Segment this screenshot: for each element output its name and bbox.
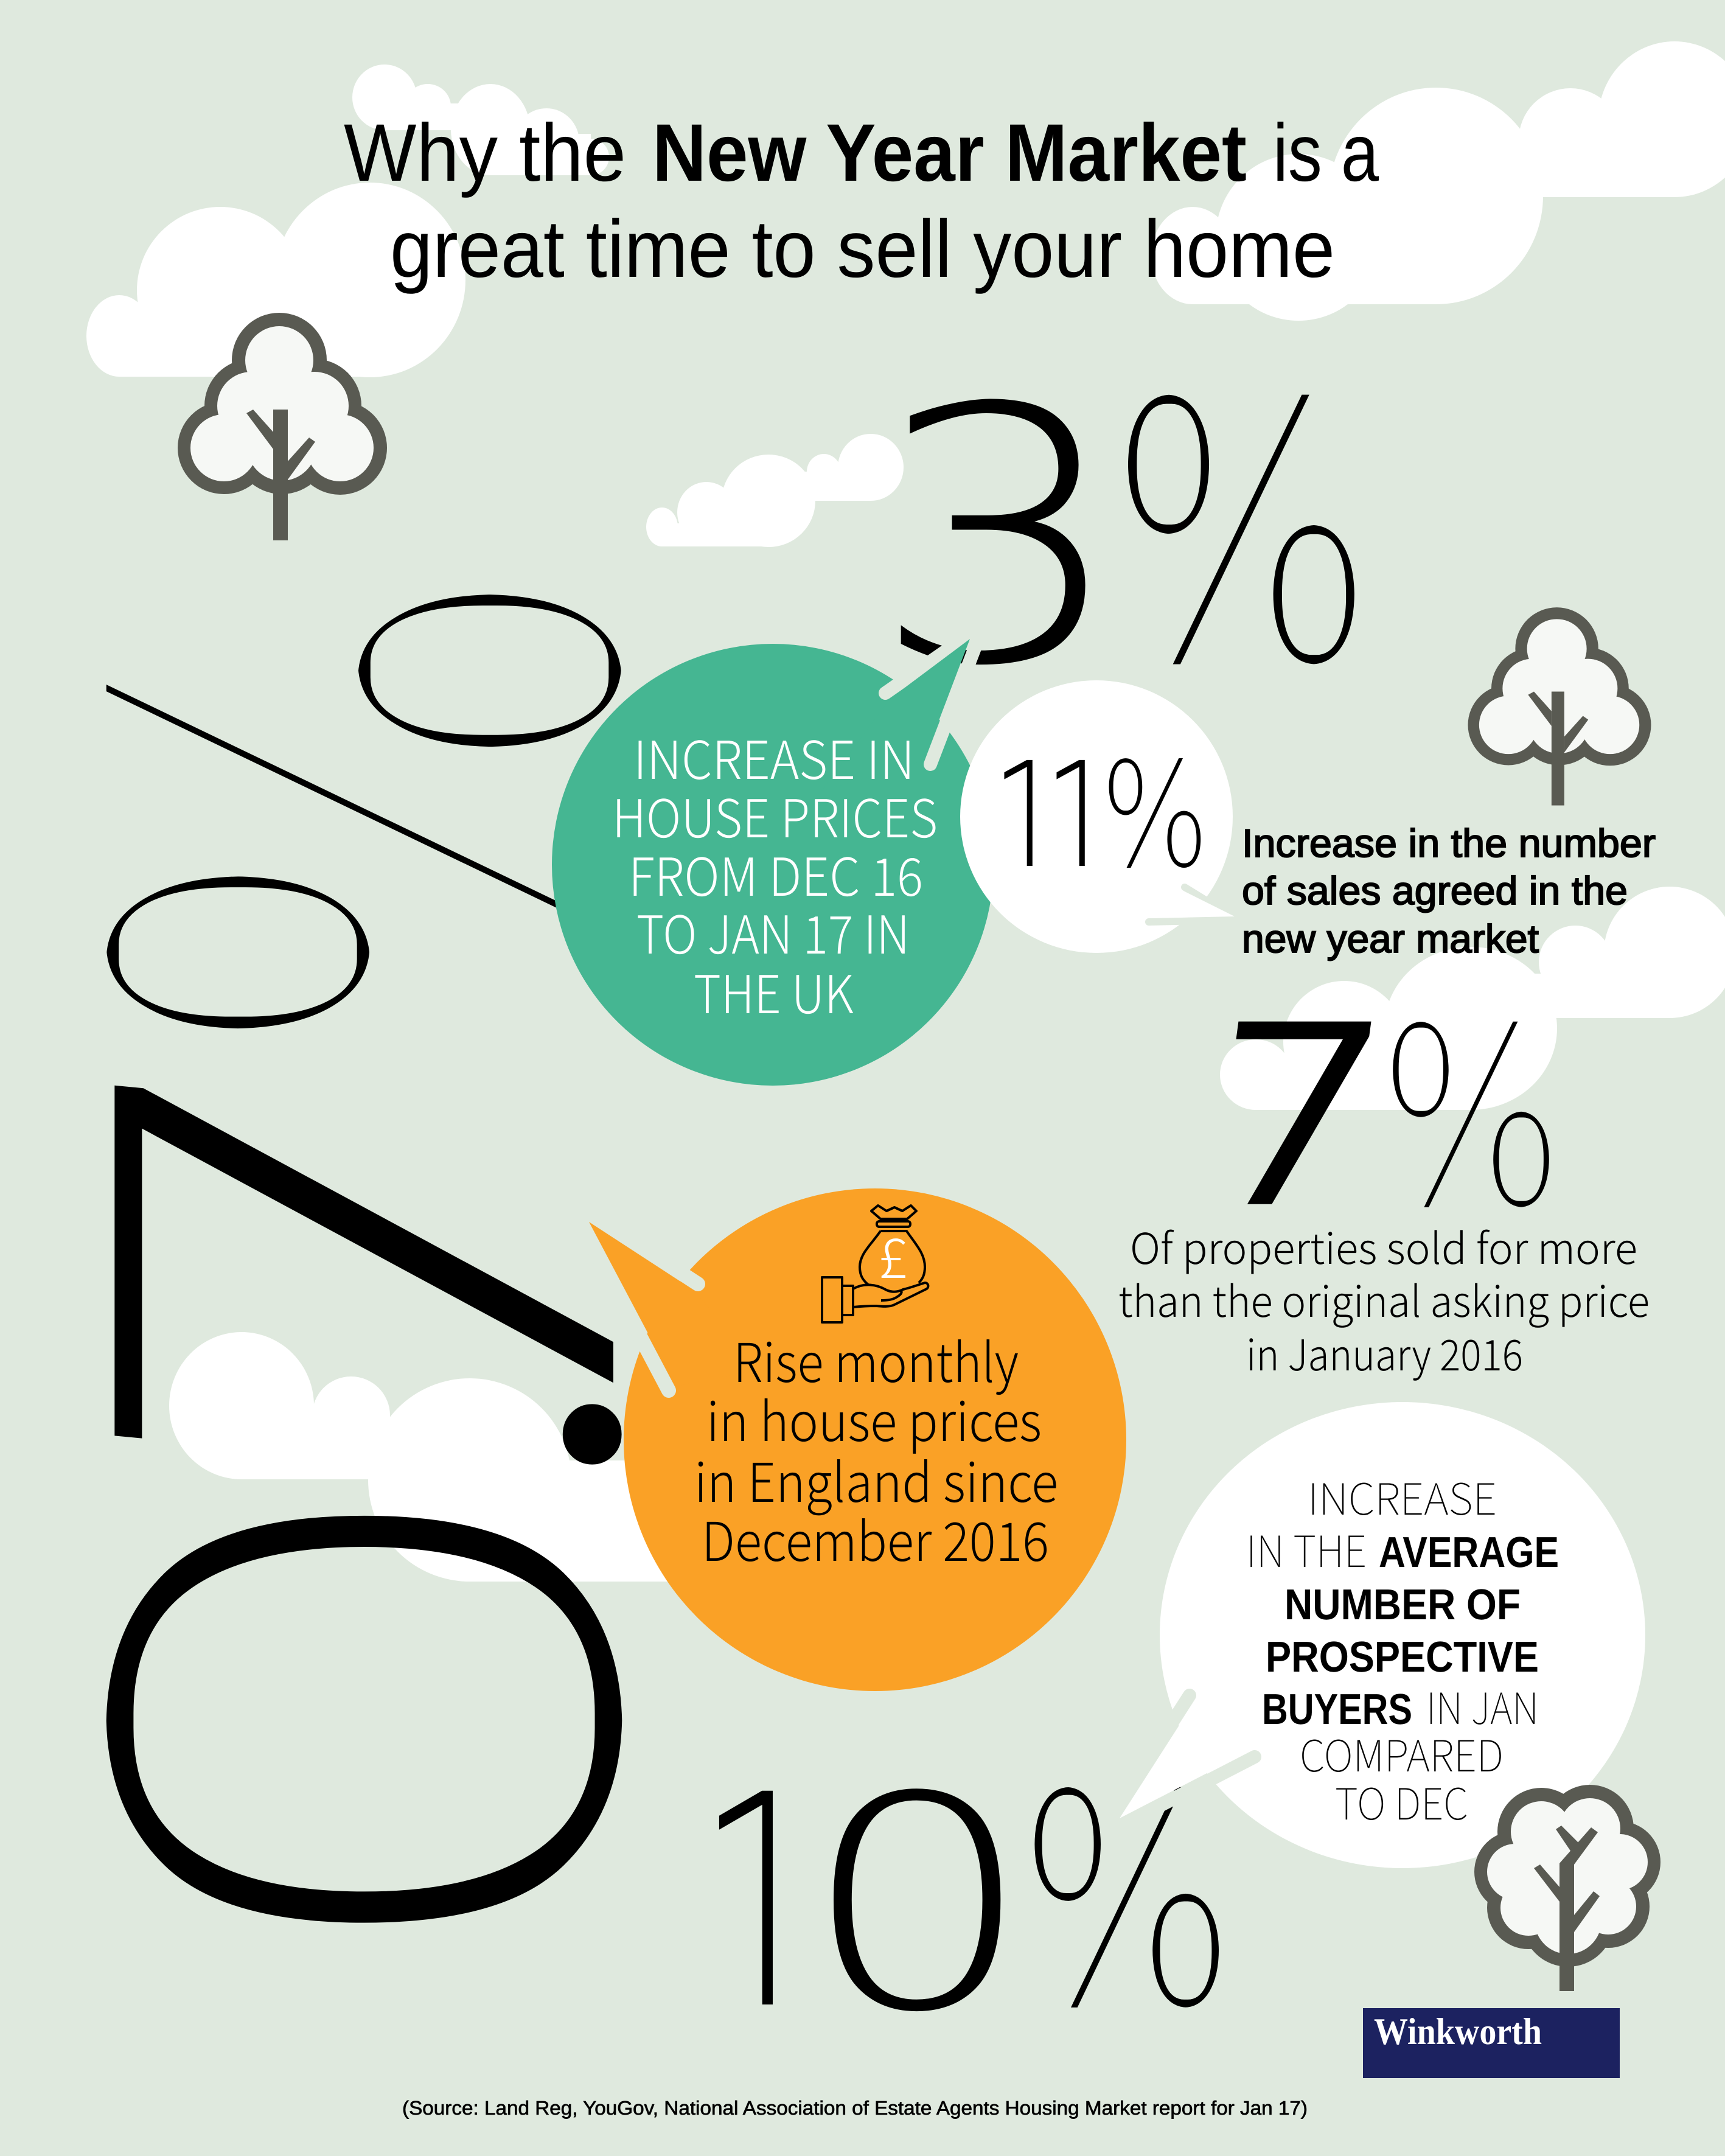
cloud: right behind 7% bbox=[1220, 887, 1725, 1110]
logo: Winkworth bbox=[1363, 2008, 1620, 2078]
speech bubble: white, prospective buyers bbox=[1113, 1402, 1645, 1868]
figure: 10%: 1 bbox=[695, 1729, 832, 2091]
title: Why the bbox=[344, 108, 626, 198]
text: prospective buyers caption: AVERAGE bbox=[1379, 1529, 1559, 1577]
logo: Winkworth: Winkworth bbox=[1374, 2011, 1542, 2053]
text: prospective buyers caption bbox=[1246, 1465, 1559, 1832]
cloud: large top right bbox=[1151, 41, 1725, 321]
text: orange bubble caption: December 2016 bbox=[702, 1499, 1049, 1577]
text: 7% caption: than the original asking price bbox=[1118, 1268, 1650, 1330]
cloud: small top left behind title bbox=[352, 65, 609, 175]
text: green bubble caption: THE UK bbox=[694, 952, 854, 1028]
icon: tree upper left bbox=[178, 313, 387, 540]
big rotated figure: 0.7% bbox=[0, 545, 784, 2013]
figure: 10%: % bbox=[1016, 1730, 1238, 2075]
big rotated figure: 0.7%: 7 bbox=[0, 985, 775, 1563]
title: New Year Market bbox=[652, 108, 1247, 198]
text: green bubble caption: FROM DEC 16 bbox=[629, 835, 923, 911]
text: orange bubble caption: in house prices bbox=[706, 1380, 1042, 1457]
text: 11% caption: of sales agreed in the bbox=[1242, 868, 1628, 913]
text: 11% caption: Increase in the number bbox=[1242, 821, 1656, 865]
figure: 3% bbox=[870, 325, 1378, 747]
text: 11% caption: new year market bbox=[1242, 916, 1539, 961]
icon: tree right bbox=[1468, 607, 1651, 806]
text: green bubble caption: HOUSE PRICES bbox=[612, 776, 938, 853]
figure: 11%: 1 bbox=[992, 729, 1064, 909]
text: prospective buyers caption: TO DEC bbox=[1335, 1770, 1468, 1832]
text: 11% caption bbox=[1242, 821, 1656, 961]
text: green bubble caption: TO JAN 17 IN bbox=[636, 893, 910, 969]
figure: 3%: % bbox=[1104, 325, 1378, 747]
figure: 11%: 1 bbox=[1044, 729, 1117, 909]
text: prospective buyers caption: IN JAN bbox=[1426, 1675, 1539, 1737]
text: prospective buyers caption: IN THE bbox=[1246, 1518, 1367, 1580]
figure: 7%: % bbox=[1376, 973, 1566, 1265]
text: 7% caption bbox=[1118, 1215, 1650, 1383]
text: prospective buyers caption: INCREASE bbox=[1308, 1465, 1497, 1527]
text: orange bubble caption: in England since bbox=[694, 1440, 1058, 1518]
text: prospective buyers caption: BUYERS bbox=[1262, 1686, 1412, 1734]
text: orange bubble caption: Rise monthly bbox=[733, 1320, 1019, 1398]
icon: pound sign: £ bbox=[878, 1215, 908, 1294]
big rotated figure: 0.7%: 0 bbox=[0, 1422, 773, 2013]
big rotated figure: 0.7%: . bbox=[170, 1370, 722, 1498]
text: green bubble caption: INCREASE IN bbox=[633, 718, 915, 794]
figure: 7%: 7 bbox=[1189, 978, 1403, 1257]
figure: 11% bbox=[1004, 758, 1201, 868]
source note: (Source: Land Reg, YouGov, National Association of Estate Agents Housing Market report for Jan 17) bbox=[402, 2097, 1308, 2119]
figure: 10%: 0 bbox=[801, 1734, 1034, 2076]
text: prospective buyers caption: PROSPECTIVE bbox=[1266, 1633, 1539, 1681]
text: green bubble caption bbox=[612, 718, 938, 1028]
figure: 10% bbox=[719, 1787, 1219, 2012]
text: orange bubble caption bbox=[694, 1320, 1058, 1577]
speech bubble: white, 11% bbox=[960, 680, 1235, 953]
figure: 11%: % bbox=[1100, 730, 1210, 901]
figure: 7% bbox=[1189, 973, 1566, 1265]
title bbox=[344, 108, 1379, 295]
figure: 3%: 3 bbox=[870, 333, 1127, 742]
text: 7% caption: in January 2016 bbox=[1246, 1322, 1523, 1383]
cloud: small centre bbox=[646, 434, 904, 547]
text: prospective buyers caption: NUMBER OF bbox=[1284, 1581, 1521, 1629]
text: 7% caption: Of properties sold for more bbox=[1130, 1215, 1637, 1277]
icon: hand holding money bag bbox=[822, 1205, 928, 1322]
title: is a bbox=[1273, 108, 1379, 198]
speech bubble: orange, rise monthly bbox=[583, 1188, 1126, 1691]
text: prospective buyers caption: COMPARED bbox=[1300, 1722, 1504, 1784]
title: great time to sell your home bbox=[390, 204, 1335, 295]
icon: oak tree lower right bbox=[1474, 1785, 1661, 1991]
cloud: lower left bbox=[169, 1332, 713, 1582]
speech bubble: green, increase in house prices bbox=[552, 636, 994, 1086]
cloud: large upper left bbox=[86, 183, 465, 377]
